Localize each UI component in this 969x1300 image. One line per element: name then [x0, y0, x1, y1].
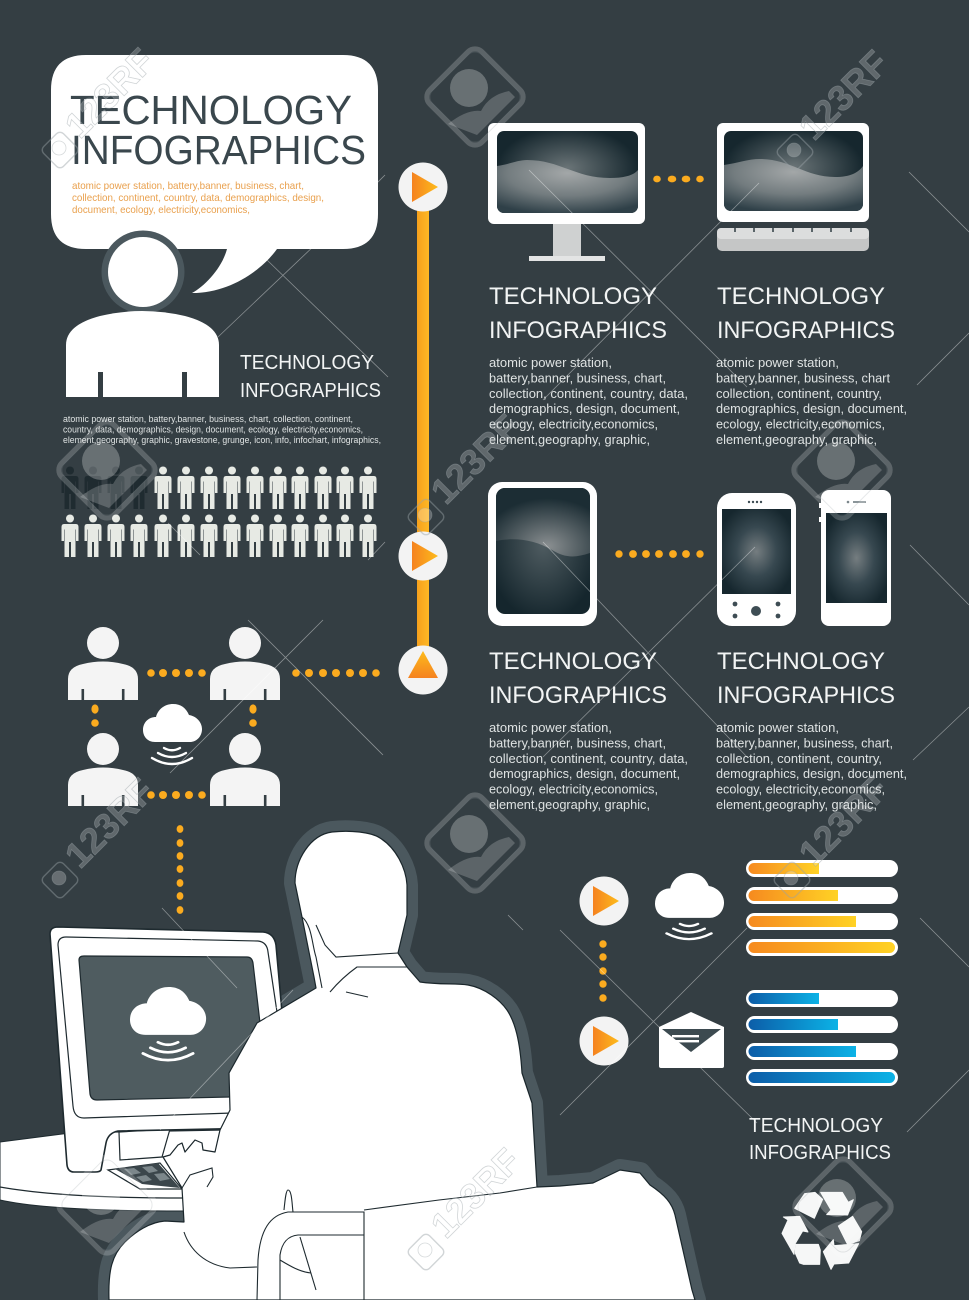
text block: laptop: INFOGRAPHICS	[717, 317, 895, 344]
text block: tablet: demographics, design, document,	[489, 766, 680, 781]
title: INFOGRAPHICS	[71, 127, 366, 173]
heading: lower right	[749, 1115, 891, 1164]
heading: lower right: INFOGRAPHICS	[749, 1142, 891, 1164]
text block: phones: collection, continent, country,	[716, 751, 882, 766]
text block: laptop: battery,banner, business, chart	[716, 370, 890, 385]
icon: person top left	[68, 627, 138, 700]
connector dots	[615, 550, 704, 558]
text block: laptop: demographics, design, document,	[716, 401, 907, 416]
icon: smartphone	[819, 490, 891, 626]
text block: phones: atomic power station,	[716, 720, 839, 735]
watermark: stamps and thin lines: 123RF	[57, 770, 162, 876]
icon: cloud with signal	[143, 704, 202, 764]
icon: play marker lower 1	[580, 876, 628, 926]
icon: laptop	[717, 123, 869, 251]
orange subtitle	[72, 180, 324, 216]
title: TECHNOLOGY	[70, 87, 352, 133]
icon: person bottom left	[68, 733, 138, 806]
icon: cloud on screen	[130, 987, 206, 1060]
chart: people pictogram	[62, 466, 376, 557]
connector dots	[653, 176, 704, 182]
text block: laptop: collection, continent, country,	[716, 386, 882, 401]
keyboard	[108, 1163, 182, 1189]
table	[0, 1130, 230, 1211]
chart: blue bars	[746, 990, 898, 1086]
text block: laptop: TECHNOLOGY	[717, 283, 885, 310]
text block: desktop: element,geography, graphic,	[489, 432, 650, 447]
icon: cloud with signal	[655, 873, 724, 939]
man silhouette	[109, 831, 695, 1300]
text block: laptop	[716, 283, 907, 447]
text block: desktop	[489, 283, 688, 447]
text block: laptop: ecology, electricity,economics,	[716, 417, 885, 432]
text block: desktop: atomic power station,	[489, 355, 612, 370]
icon: recycle	[782, 1192, 862, 1269]
text block: phones	[716, 648, 907, 812]
heading: lower right: TECHNOLOGY	[749, 1115, 883, 1137]
panel: people network	[68, 627, 380, 806]
network connector dots	[91, 669, 380, 799]
title	[70, 87, 366, 173]
orange subtitle: collection, continent, country, data, demographics, design,	[72, 192, 324, 204]
text block: desktop: battery,banner, business, chart,	[489, 370, 666, 385]
text block: tablet: TECHNOLOGY	[489, 648, 657, 675]
text block: desktop: demographics, design, document,	[489, 401, 680, 416]
connector dots	[599, 940, 607, 1002]
text block: tablet: ecology, electricity,economics,	[489, 782, 658, 797]
icon: person bottom right	[210, 733, 280, 806]
watermark: stamps and thin lines: 123RF	[57, 40, 162, 146]
icon: play marker lower 2	[580, 1016, 628, 1066]
watermark: stamps and thin lines: 123RF	[423, 406, 528, 512]
text block: person description: atomic power station, battery,banner, business, chart, collection, continent,	[63, 414, 353, 425]
text block: phones: demographics, design, document,	[716, 766, 907, 781]
text block: phones: INFOGRAPHICS	[717, 682, 895, 709]
text block: phones: ecology, electricity,economics,	[716, 782, 885, 797]
text block: tablet: INFOGRAPHICS	[489, 682, 667, 709]
text block: desktop: ecology, electricity,economics,	[489, 417, 658, 432]
icon: person top right	[210, 627, 280, 700]
watermark: stamps and thin lines: 123RF	[423, 1140, 528, 1246]
panel: man at computer	[0, 831, 695, 1300]
text block: tablet: battery,banner, business, chart,	[489, 735, 666, 750]
heading: person: INFOGRAPHICS	[240, 380, 381, 402]
text block: laptop: atomic power station,	[716, 355, 839, 370]
speech bubble shape	[51, 55, 378, 293]
panel: speech bubble with title	[51, 55, 378, 293]
text block: person description	[63, 414, 381, 446]
timeline	[398, 162, 448, 694]
text block: desktop: INFOGRAPHICS	[489, 317, 667, 344]
watermark: stamps and thin lines: 123RF	[791, 42, 896, 148]
icon: android phone	[717, 493, 796, 626]
text block: tablet: collection, continent, country, data,	[489, 751, 688, 766]
text block: laptop: element,geography, graphic,	[716, 432, 877, 447]
chart: orange bars	[746, 860, 898, 956]
text block: tablet: atomic power station,	[489, 720, 612, 735]
text block: tablet	[489, 648, 688, 812]
text block: person description: country, data, demographics, design, document, ecology, electricity,economics,	[63, 424, 363, 436]
icon: large person	[66, 230, 219, 397]
icon: tablet	[488, 482, 597, 626]
connector dots: to computer	[177, 825, 183, 914]
text block: desktop: collection, continent, country, data,	[489, 386, 688, 401]
orange subtitle: document, ecology, electricity,economics,	[72, 204, 250, 216]
watermark: stamps and thin lines: 123RF	[791, 768, 896, 874]
icon: envelope	[659, 1012, 724, 1068]
icon: up marker	[398, 646, 448, 694]
text block: phones: battery,banner, business, chart,	[716, 735, 893, 750]
icon: play marker middle	[398, 532, 448, 580]
man halo	[109, 831, 695, 1300]
computer monitor	[50, 927, 282, 1172]
text block: desktop: TECHNOLOGY	[489, 283, 657, 310]
man and chair line details	[182, 917, 537, 1300]
heading: person	[240, 352, 381, 402]
text block: phones: TECHNOLOGY	[717, 648, 885, 675]
text block: person description: element,geography, graphic, gravestone, grunge, icon, info, infochart, infographics,	[63, 435, 381, 446]
orange subtitle: atomic power station, battery,banner, business, chart,	[72, 180, 304, 192]
text block: tablet: element,geography, graphic,	[489, 797, 650, 812]
icon: desktop monitor	[488, 123, 645, 261]
heading: person: TECHNOLOGY	[240, 352, 374, 374]
icon: play marker top	[398, 162, 448, 212]
text block: phones: element,geography, graphic,	[716, 797, 877, 812]
